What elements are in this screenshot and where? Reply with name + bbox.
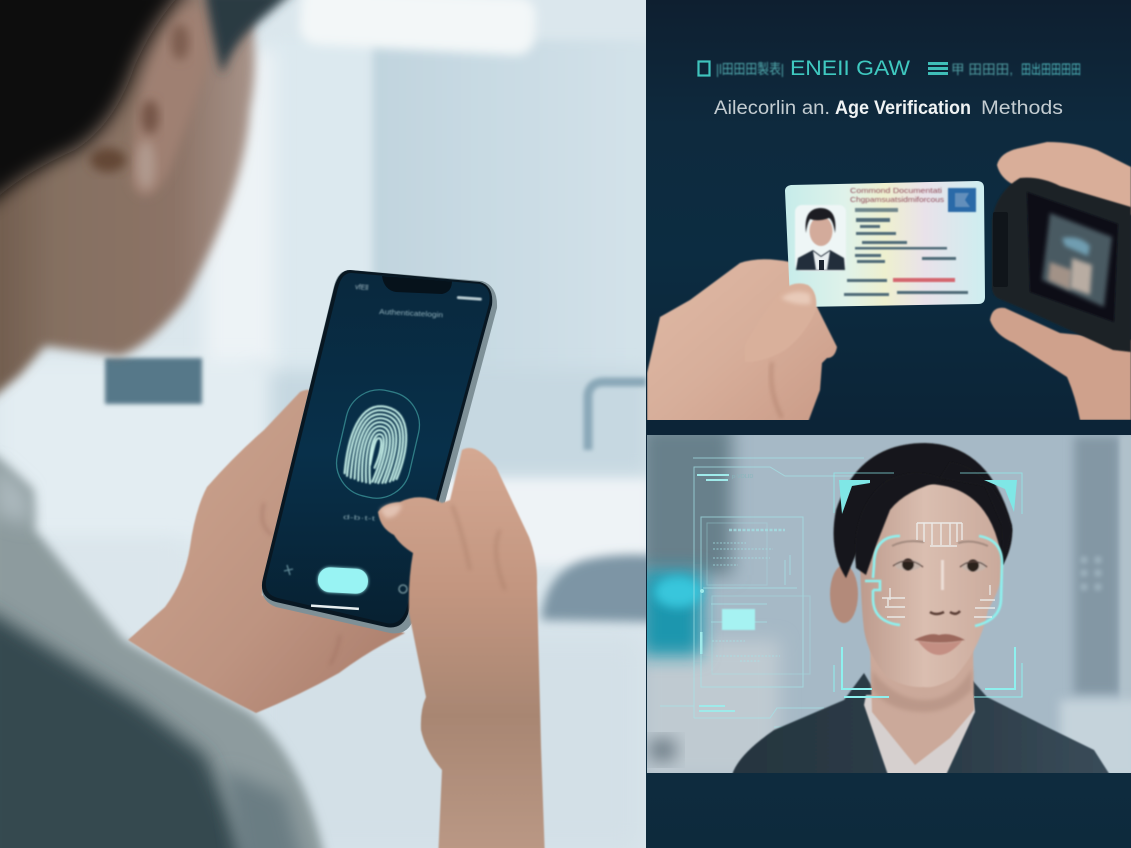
card emblem	[948, 188, 976, 212]
ID card: Chgpamsuatsidmiforcous	[850, 195, 944, 204]
person: dark hair	[0, 0, 195, 210]
right hand with thumb	[378, 448, 545, 848]
person: ear	[90, 7, 209, 196]
thumb crease	[452, 507, 503, 584]
prompt text: d-b·t-t	[343, 514, 376, 523]
hair back	[834, 443, 1012, 578]
thumb on card	[789, 282, 818, 308]
ID card	[785, 181, 985, 307]
suit	[732, 673, 1110, 775]
lower right hand	[990, 308, 1131, 420]
overlay ID thumbnail	[722, 609, 755, 630]
panel: facial recognition	[640, 425, 1131, 780]
title row: |l田田田製表|	[716, 61, 784, 77]
card header text: Commond Documentati	[850, 186, 942, 195]
home indicator	[311, 604, 359, 610]
icon: title square	[698, 62, 710, 76]
title row: 甲 田田田,	[951, 62, 1013, 77]
thumb highlight	[380, 504, 402, 518]
hair front right	[940, 462, 1012, 565]
hand finger crease	[771, 362, 782, 418]
person: grey shirt	[0, 450, 325, 848]
button	[317, 567, 369, 594]
face scan brackets	[865, 536, 1002, 626]
subtitle	[714, 100, 1062, 118]
shirt collar	[864, 695, 975, 775]
person: hair shadow behind ear	[205, 0, 295, 75]
icon: plus	[284, 565, 293, 575]
data overlay panel	[660, 458, 879, 737]
chin shadow	[872, 668, 972, 712]
hair front fringe	[855, 473, 945, 575]
background	[640, 425, 1131, 780]
left hand behind phone	[128, 390, 405, 713]
icon: title bars	[928, 62, 948, 75]
status bar and header text: vfEll	[355, 284, 369, 292]
person: neck and face skin	[0, 0, 255, 400]
subtitle: Methods	[981, 98, 1063, 119]
subtitle: Age Verification	[835, 98, 971, 119]
left hand crease	[260, 504, 271, 534]
icon: fingerprint	[336, 389, 420, 499]
blurred office background	[0, 0, 660, 848]
background dots	[1080, 556, 1102, 591]
panel: fingerprint scan on smartphone	[0, 0, 660, 848]
thumb nail highlight	[781, 292, 811, 304]
subtitle: Ailecorlin an.	[714, 98, 830, 119]
ear	[830, 565, 858, 623]
smartphone	[250, 265, 500, 640]
face features	[892, 541, 988, 655]
overlay labels	[697, 474, 753, 712]
heading: ENEII GAW	[790, 57, 910, 80]
camera device	[992, 178, 1131, 352]
overlay labels: p·VOLID	[732, 474, 753, 480]
card portrait	[795, 205, 846, 271]
face	[860, 484, 1003, 687]
title row: 田出田田田田	[1021, 62, 1081, 77]
card data lines	[844, 208, 968, 296]
upper right hand	[997, 142, 1131, 215]
forehead barcode and cheek marks	[882, 523, 995, 617]
icon: circle	[399, 585, 407, 593]
title row	[697, 60, 1081, 78]
neck	[870, 645, 974, 765]
left hand holding card	[647, 259, 837, 425]
notch	[382, 276, 452, 294]
panel: right navy background	[646, 0, 1131, 848]
phone screen	[266, 273, 490, 624]
smartphone: Authenticatelogin	[379, 307, 443, 319]
corner frames	[834, 473, 1022, 697]
panel: ID card check	[647, 57, 1131, 425]
